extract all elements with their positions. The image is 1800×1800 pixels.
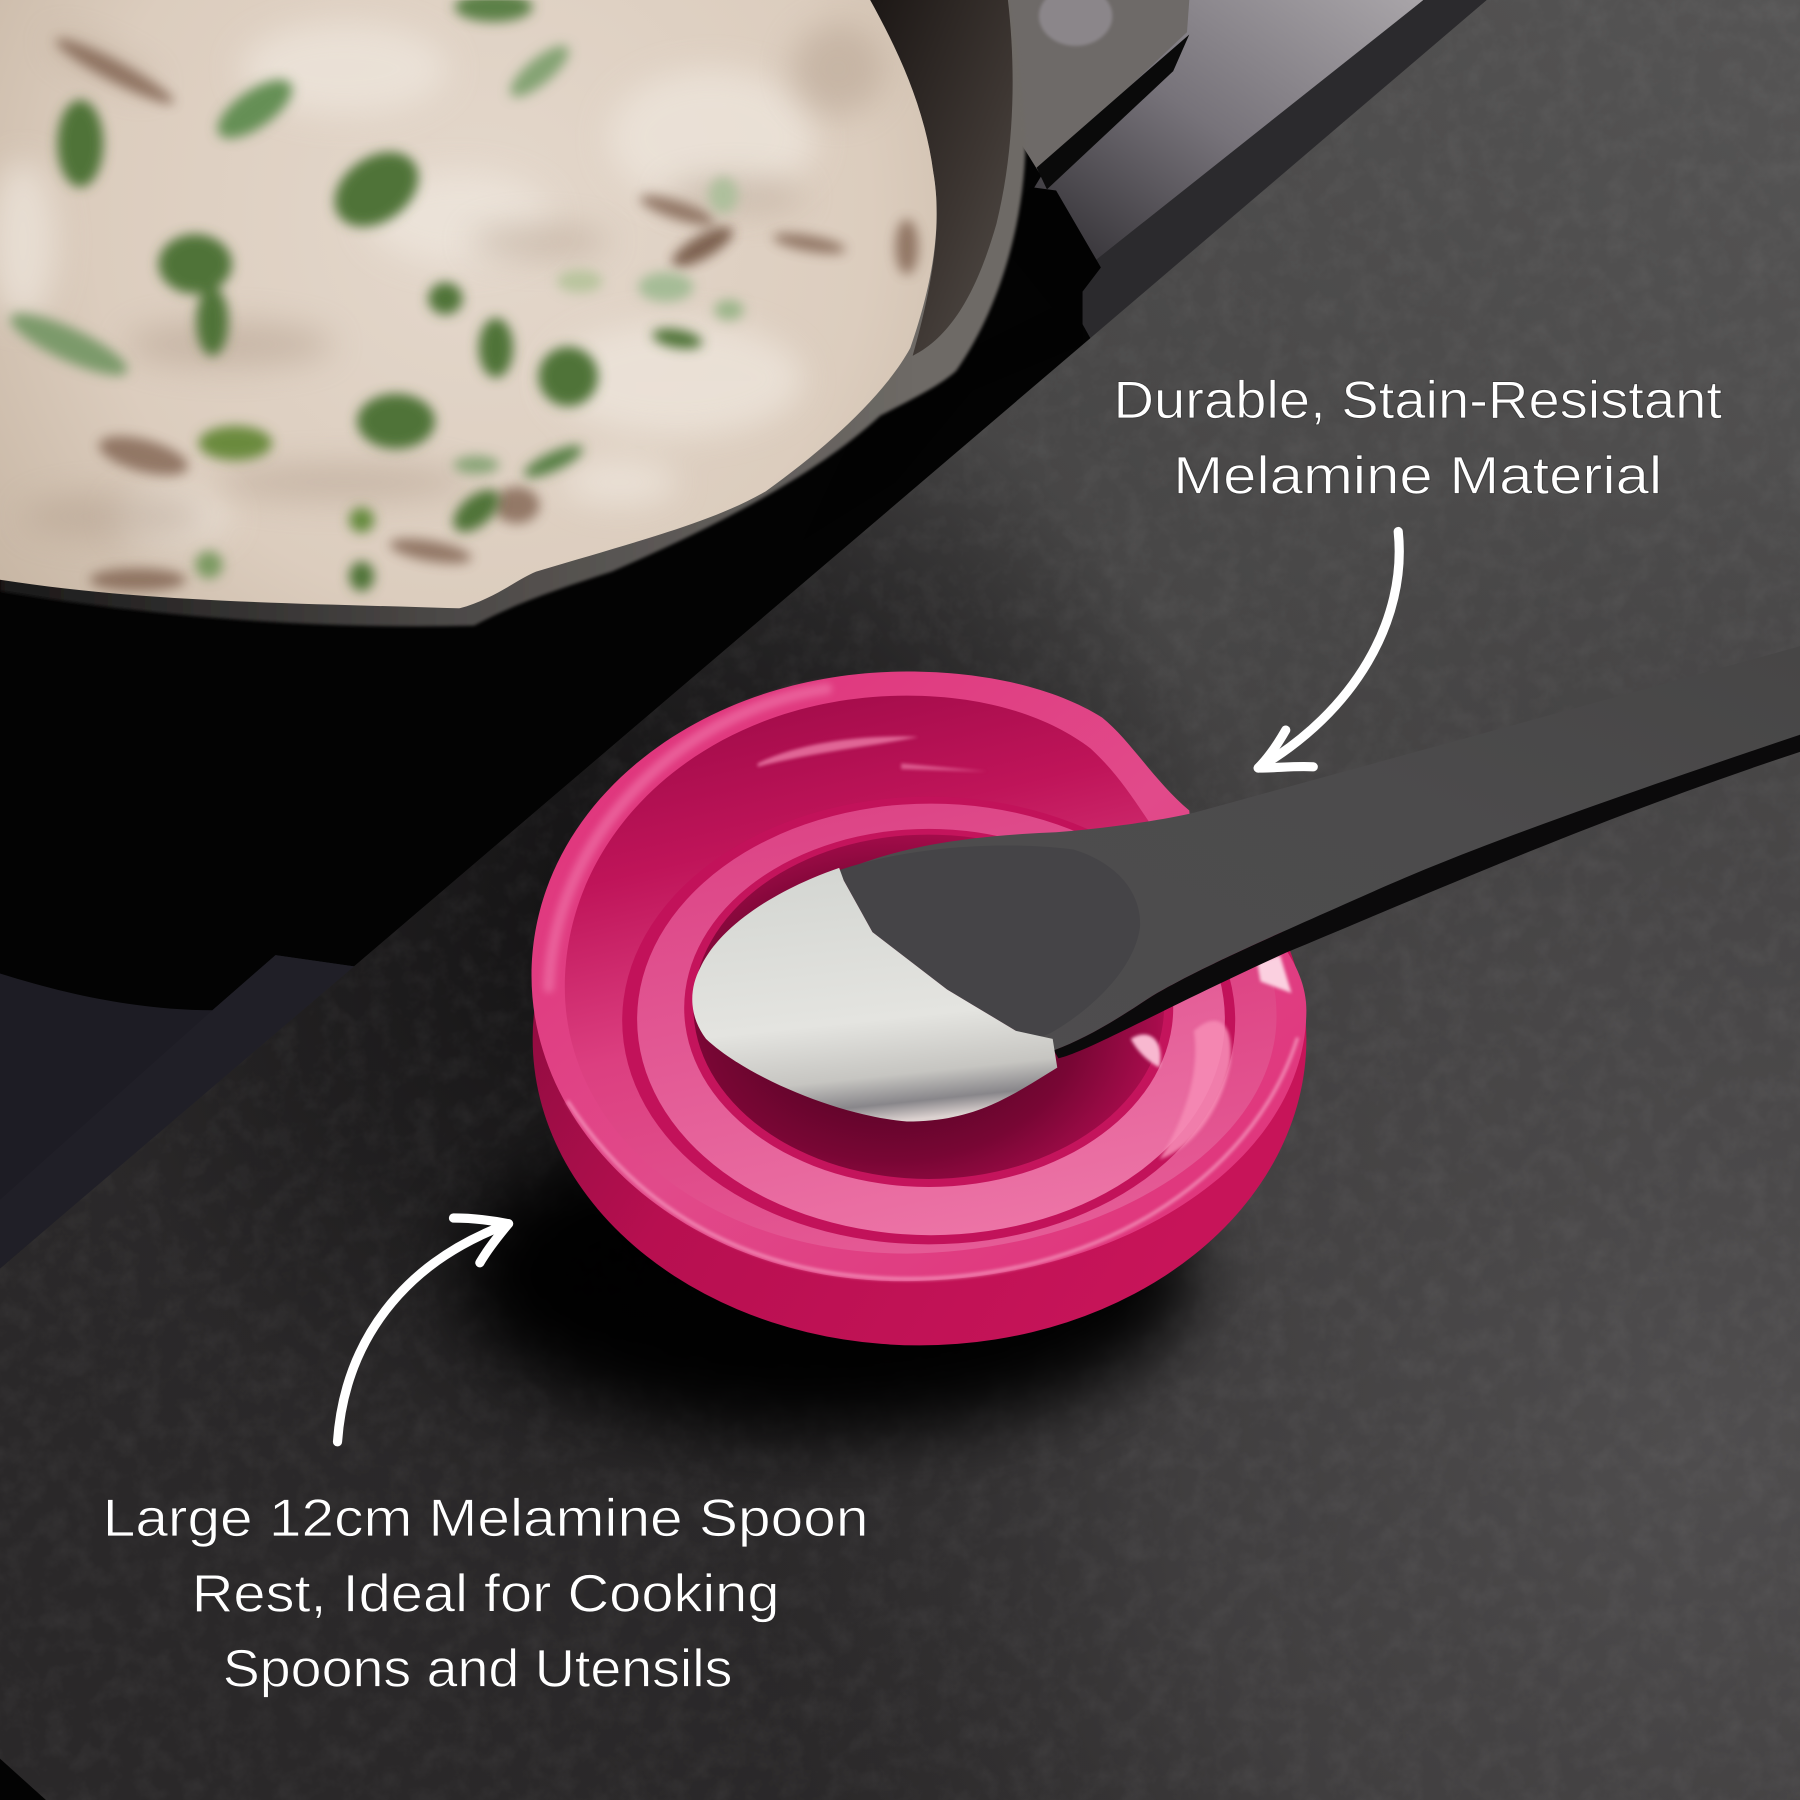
arrow: to melamine material [1258, 532, 1399, 768]
callout: large spoon rest: Large 12cm Melamine Spoon [103, 1489, 868, 1548]
pan rim [0, 0, 1025, 626]
pan inner wall [870, 0, 1013, 356]
rest outer rim [532, 672, 1306, 1281]
callout: large spoon rest: Spoons and Utensils [223, 1639, 732, 1698]
raised pink ring [637, 804, 1225, 1235]
sauce with herbs and mushrooms [0, 0, 953, 643]
shadow under the rest [459, 1114, 1194, 1435]
skillet [0, 0, 1189, 643]
callout: large spoon rest [103, 1489, 868, 1698]
groove ring [622, 797, 1235, 1244]
spoon handle and head [844, 646, 1800, 1050]
gloss highlights [758, 737, 1291, 1159]
cooktop glass: top right strip [1033, 0, 1487, 339]
inner wall [565, 696, 1277, 1254]
spoon bowl hollow [839, 846, 1140, 1037]
inner groove [684, 829, 1173, 1187]
spoon rest [459, 672, 1306, 1435]
arrow: to spoon rest [338, 1218, 509, 1442]
handle shadow edge [1054, 735, 1800, 1058]
pan stand bracket [804, 187, 1101, 540]
rim highlights [549, 689, 1297, 1279]
spoon [692, 646, 1800, 1122]
central well [693, 835, 1164, 1179]
sauce on spoon [692, 868, 1057, 1122]
callout: durable material [1114, 371, 1722, 506]
rest outer body [533, 732, 1306, 1345]
pan handle [999, 0, 1189, 189]
callout: durable material: Melamine Material [1173, 447, 1662, 506]
callout: durable material: Durable, Stain-Resistant [1114, 371, 1722, 430]
callout: large spoon rest: Rest, Ideal for Cooking [192, 1565, 779, 1624]
cooktop glass: lower left [0, 955, 356, 1268]
